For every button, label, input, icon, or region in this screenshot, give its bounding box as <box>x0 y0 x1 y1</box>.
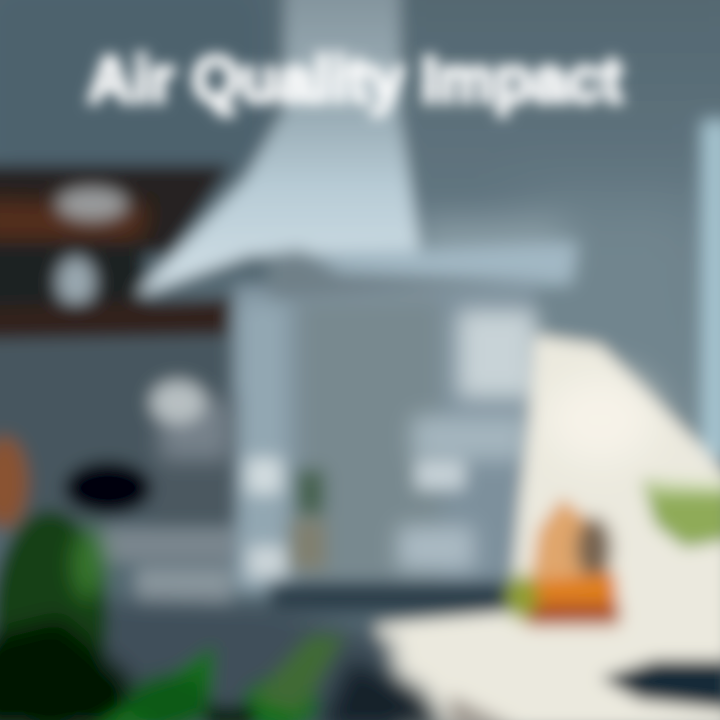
sink dark oval <box>600 660 720 710</box>
dark appliance spot <box>64 461 152 515</box>
appliance body <box>235 285 536 612</box>
small jar <box>150 380 235 525</box>
warm highlight on counter <box>545 375 655 465</box>
bottom right brownish shade <box>450 695 520 720</box>
left lower counter <box>100 528 235 606</box>
range hood <box>135 0 578 300</box>
title: Air Quality Impact <box>88 42 623 116</box>
lower shelf <box>0 298 232 340</box>
upper shelf <box>0 165 232 315</box>
bottom counter dark <box>100 600 400 720</box>
orange at left edge <box>0 436 28 528</box>
herb stem <box>290 470 326 570</box>
lime slice <box>642 480 720 548</box>
counter and light diagonal <box>375 335 720 720</box>
fruit <box>506 498 618 624</box>
right edge light strip <box>702 120 720 460</box>
left wall lower <box>0 335 240 525</box>
dark basin <box>320 660 445 720</box>
plants <box>0 510 345 720</box>
